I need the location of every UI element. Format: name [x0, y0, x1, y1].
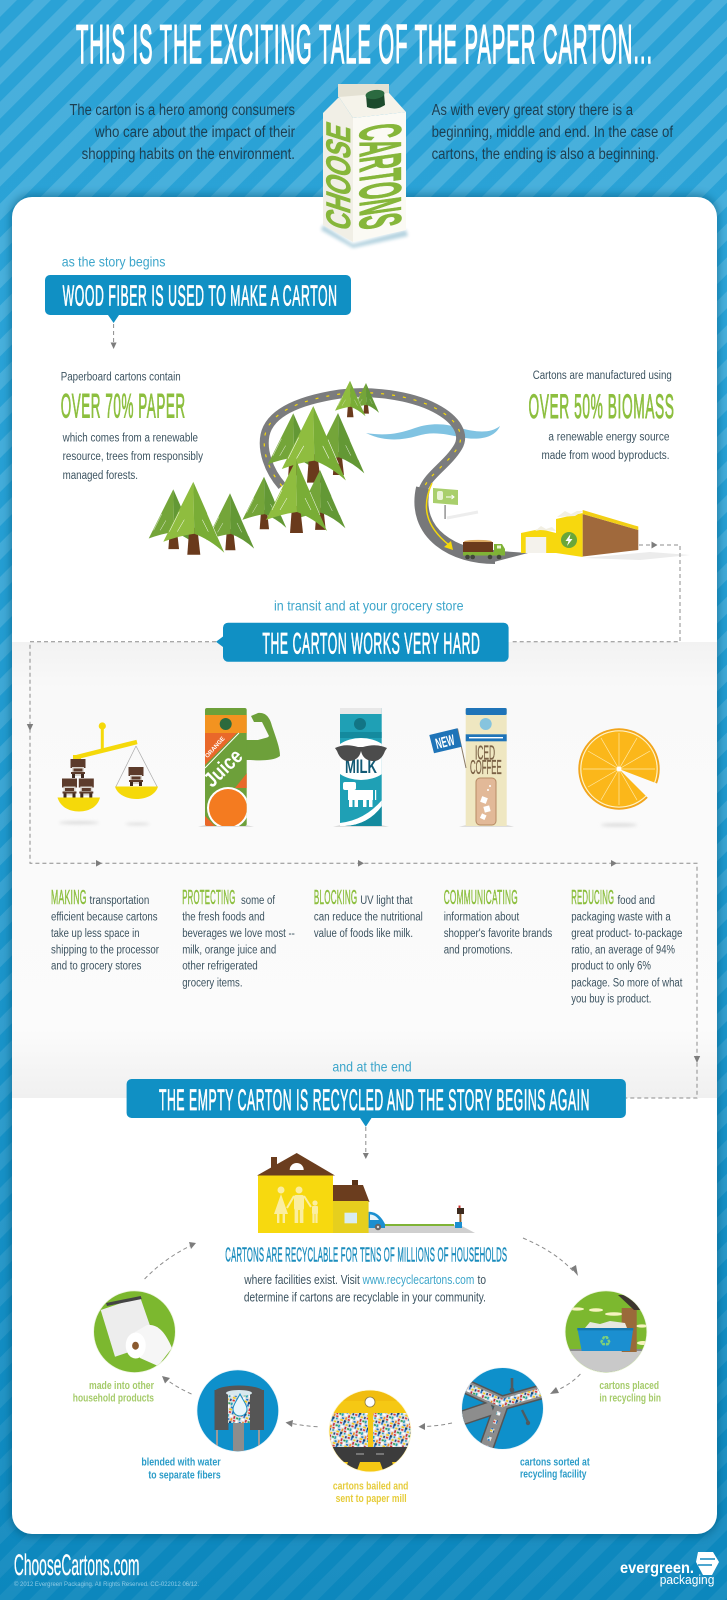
column: blocking: value of foods like milk.	[314, 928, 413, 940]
column: reducing: ratio, an average of 94%	[571, 944, 675, 956]
column: communicating: COMMUNICATING	[444, 887, 518, 909]
section lead: and at the end: and at the end	[332, 1059, 412, 1075]
column: making: take up less space in	[51, 928, 140, 940]
stat: over 70% paper: resource, trees from responsibly	[63, 451, 203, 463]
icon: iced coffee carton with NEW flag: COFFEE	[470, 757, 502, 779]
arrow: banner to house	[363, 1127, 369, 1159]
column: communicating	[444, 887, 552, 956]
column: protecting: the fresh foods and	[182, 911, 265, 923]
icon: juice carton with muscle: Juice	[200, 745, 247, 792]
intro text: left: The carton is a hero among consumers	[70, 102, 295, 119]
footer: evergreen packaging logo: packaging	[660, 1572, 714, 1587]
label: made into other household products	[73, 1380, 155, 1404]
label: cartons bailed and sent to paper mill	[333, 1480, 408, 1505]
column: protecting: other refrigerated	[182, 961, 258, 973]
illustration: forest	[149, 381, 379, 555]
circle: household products	[93, 1290, 176, 1373]
label: made into other household products: household products	[73, 1392, 154, 1404]
circle: water blending	[195, 1368, 281, 1454]
label: cartons sorted at recycling facility: recycling facility	[520, 1469, 587, 1481]
label: cartons sorted at recycling facility: cartons sorted at	[520, 1456, 590, 1468]
label: cartons bailed and sent to paper mill: cartons bailed and	[333, 1480, 408, 1492]
column: blocking: can reduce the nutritional	[314, 911, 423, 923]
column: reducing: great product- to-package	[571, 928, 682, 940]
milk label text: MILK	[345, 757, 377, 778]
illustration: house, family, car, mailbox	[257, 1153, 475, 1233]
intro text: right: beginning, middle and end. In the case of	[432, 124, 674, 141]
circle: bales to paper mill	[328, 1389, 412, 1473]
icon: milk carton with sunglasses	[331, 708, 391, 827]
column: communicating: shopper's favorite brands	[444, 928, 552, 940]
column: protecting: PROTECTING	[182, 887, 236, 909]
section lead: in transit: in transit and at your grocery store	[274, 598, 464, 614]
text: where facilities exist: www.recyclecartons.com	[362, 1273, 474, 1287]
column: making: and to grocery stores	[51, 961, 142, 973]
carton word: CHOOSE: CHOOSE	[320, 118, 358, 235]
icon: biomass factory	[521, 510, 690, 560]
column: reducing: you buy is product.	[571, 994, 651, 1006]
intro text: left	[70, 102, 295, 163]
label: cartons sorted at recycling facility	[520, 1456, 590, 1481]
cow	[343, 782, 376, 807]
footer: copyright: © 2012 Evergreen Packaging. All Rights Reserved. CC-022012 06/12.	[14, 1580, 199, 1588]
text: where facilities exist: determine if cartons are recyclable in your community.	[244, 1291, 486, 1305]
circle: recycling bin	[564, 1290, 648, 1373]
column: protecting: grocery items.	[182, 977, 242, 989]
sunglasses	[335, 745, 387, 761]
icon: logging truck	[463, 540, 505, 559]
column: protecting: some of	[241, 895, 276, 907]
arrow: factory to store	[510, 542, 680, 642]
icon: juice carton with muscle	[198, 708, 280, 829]
circle: sorting facility	[461, 1367, 544, 1450]
family	[274, 1186, 318, 1223]
carton logo: Choose Cartons	[320, 84, 414, 248]
arrow: left and lower dashed route	[27, 642, 700, 1098]
label: cartons placed in recycling bin: cartons placed	[599, 1380, 659, 1392]
panel: grey grocery band	[12, 642, 717, 1098]
juice label text: ORANGE	[205, 736, 227, 760]
stat: over 70% paper	[61, 372, 203, 482]
intro text: right: As with every great story there is a	[432, 102, 633, 119]
section lead: as the story begins: as the story begins	[62, 254, 166, 270]
text: ChooseCartons.com	[14, 1549, 139, 1582]
banner: the carton works very hard	[216, 623, 509, 662]
icon: orange slice	[578, 728, 661, 827]
column: communicating: and promotions.	[444, 944, 513, 956]
column: making: MAKING	[51, 887, 87, 909]
stat: over 50% biomass: made from wood byproducts.	[542, 450, 670, 462]
icon: iced coffee carton with NEW flag: ICED	[475, 742, 495, 764]
arrows: recycling loop	[145, 1238, 580, 1430]
column: reducing: REDUCING	[571, 887, 614, 909]
label: cartons bailed and sent to paper mill: sent to paper mill	[336, 1493, 407, 1505]
label: cartons placed in recycling bin: in recycling bin	[599, 1392, 661, 1404]
icon: balance scale with trucks	[58, 722, 158, 825]
footer: evergreen packaging logo: evergreen.	[620, 1560, 694, 1577]
stat: over 50% biomass: Cartons are manufactured using	[533, 370, 672, 382]
banner: wood fiber	[45, 275, 351, 323]
icon: road sign	[433, 488, 478, 519]
illustration: river	[366, 424, 500, 439]
label: cartons placed in recycling bin	[599, 1380, 661, 1404]
intro text: left: who care about the impact of their	[94, 124, 295, 141]
column: blocking	[314, 887, 423, 940]
text: where facilities exist	[243, 1273, 486, 1305]
text: CARTONS	[347, 119, 414, 233]
column: protecting: beverages we love most --	[182, 928, 295, 940]
intro text: right	[432, 102, 674, 163]
column: reducing: package. So more of what	[571, 977, 683, 989]
column: blocking: UV light that	[360, 895, 413, 907]
illustration: winding road	[264, 393, 528, 563]
arrow: banner to text	[111, 324, 117, 349]
icon: iced coffee carton with NEW flag	[429, 708, 514, 827]
recycling symbol: ♻	[599, 1334, 612, 1350]
banner: recycled	[127, 1079, 626, 1127]
mailbox	[455, 1206, 464, 1228]
column: making: transportation	[90, 895, 149, 907]
car	[369, 1212, 385, 1230]
text: WOOD FIBER IS USED TO MAKE A CARTON	[63, 280, 338, 312]
column: making	[51, 887, 159, 973]
stat: over 50% biomass: a renewable energy source	[548, 432, 670, 444]
column: reducing: product to only 6%	[571, 961, 651, 973]
carton cap	[365, 89, 385, 109]
stat: over 50% biomass	[528, 370, 674, 462]
column: making: shipping to the processor	[51, 944, 159, 956]
column: making: efficient because cartons	[51, 911, 158, 923]
label: blended with water to separate fibers	[141, 1457, 221, 1481]
column: communicating: information about	[444, 911, 520, 923]
flag word: NEW	[434, 732, 457, 753]
label: made into other household products: made into other	[89, 1380, 155, 1392]
column: protecting: milk, orange juice and	[182, 944, 276, 956]
stat: over 70% paper: Paperboard cartons contain	[61, 372, 181, 384]
column: reducing	[571, 887, 683, 1006]
intro text: left: shopping habits on the environment.	[82, 146, 295, 163]
text: where facilities exist: where facilities exist. Visit	[243, 1273, 360, 1287]
stat: over 70% paper: which comes from a renewable	[62, 433, 198, 445]
intro text: right: cartons, the ending is also a beginning.	[432, 146, 659, 163]
label: blended with water to separate fibers: to separate fibers	[148, 1469, 221, 1481]
column: reducing: packaging waste with a	[571, 911, 671, 923]
column: blocking: BLOCKING	[314, 887, 357, 909]
column: protecting	[182, 887, 295, 989]
label: blended with water to separate fibers: blended with water	[141, 1457, 221, 1469]
footer: evergreen packaging logo	[620, 1552, 719, 1587]
column: reducing: food and	[618, 895, 655, 907]
stat: over 70% paper: managed forests.	[63, 470, 138, 482]
text: OVER 70% PAPER	[61, 388, 186, 426]
text: where facilities exist: to	[478, 1273, 486, 1287]
